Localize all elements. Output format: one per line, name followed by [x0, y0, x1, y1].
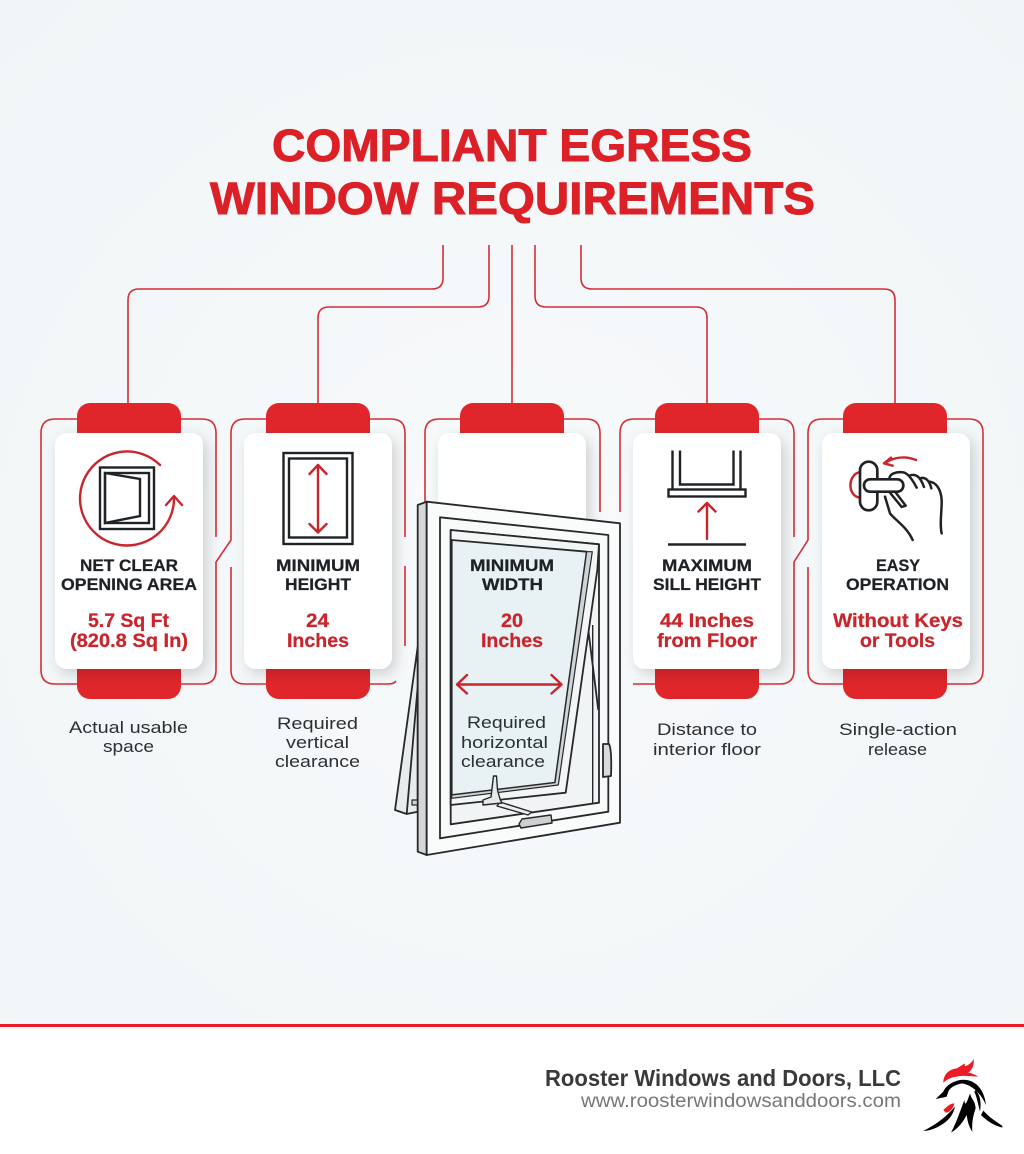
card 4: maximum sill height [633, 403, 781, 699]
footer [0, 1024, 1024, 1154]
label: minimum width: WIDTH [482, 576, 543, 594]
icon: sill with arrow [668, 450, 746, 544]
card 1: net clear opening area: (820.8 Sq In) [70, 631, 188, 652]
card 4: maximum sill height: 44 Inches [660, 611, 754, 632]
icon: window with rotation arrow [80, 451, 182, 545]
caption: distance to interior floor: Distance to [657, 721, 757, 739]
caption: required horizontal clearance: horizontal [461, 734, 548, 752]
card 1: net clear opening area: NET CLEAR [80, 557, 178, 575]
card 4: maximum sill height: from Floor [657, 631, 758, 652]
caption: required vertical clearance: vertical [286, 734, 349, 752]
window: tilted sash and glass [451, 530, 599, 805]
connector lines from title to cards [128, 245, 895, 404]
caption: required horizontal clearance: Required [467, 714, 546, 732]
window: outer frame [418, 502, 620, 855]
card 3: minimum width background [438, 403, 586, 669]
caption: actual usable space: space [103, 738, 154, 756]
caption: required vertical clearance: Required [277, 715, 358, 733]
arrow: horizontal width [457, 675, 562, 694]
caption: required horizontal clearance: clearance [461, 753, 545, 771]
icon: rooster logo [923, 1058, 1002, 1133]
website: www.roosterwindowsanddoors.com [580, 1090, 901, 1112]
card outline brackets [41, 419, 983, 684]
caption: actual usable space [69, 719, 188, 756]
label: minimum width: 20 [501, 611, 523, 632]
label: minimum width: MINIMUM [470, 557, 554, 575]
caption: distance to interior floor [653, 721, 762, 759]
window: left stay and back sash [395, 647, 418, 814]
card 5: easy operation: Without Keys [833, 611, 963, 632]
icon: hand turning lever [850, 457, 942, 540]
card 4: maximum sill height: SILL HEIGHT [653, 576, 761, 594]
card 5: easy operation: or Tools [860, 631, 935, 652]
card 5: easy operation: EASY [876, 557, 920, 575]
caption: required horizontal clearance [461, 714, 548, 771]
window: side lock [603, 744, 611, 777]
card 4: maximum sill height: MAXIMUM [662, 557, 752, 575]
caption: single-action release [839, 721, 957, 759]
label: minimum width: Inches [481, 631, 543, 652]
caption: actual usable space: Actual usable [69, 719, 188, 737]
card 5: easy operation [822, 403, 970, 699]
company name: Rooster Windows and Doors, LLC [545, 1065, 901, 1091]
window: crank handle and arm [483, 776, 552, 828]
caption: distance to interior floor: interior floor [653, 741, 762, 759]
title: WINDOW REQUIREMENTS [210, 173, 815, 224]
title [210, 120, 815, 224]
card 2: minimum height [244, 403, 392, 699]
card 1: net clear opening area: OPENING AREA [61, 576, 197, 594]
caption: single-action release: Single-action [839, 721, 957, 739]
caption: required vertical clearance [275, 715, 360, 771]
card 2: minimum height: 24 [306, 611, 329, 632]
caption: required vertical clearance: clearance [275, 753, 360, 771]
card 1: net clear opening area: 5.7 Sq Ft [88, 611, 170, 632]
card 5: easy operation: OPERATION [846, 576, 949, 594]
icon: window with vertical arrow [284, 453, 352, 544]
card 2: minimum height: MINIMUM [276, 557, 360, 575]
caption: single-action release: release [868, 741, 927, 759]
awning window illustration [395, 502, 620, 855]
card 2: minimum height: HEIGHT [285, 576, 351, 594]
card 1: net clear opening area [55, 403, 203, 699]
title: COMPLIANT EGRESS [272, 120, 752, 171]
card 2: minimum height: Inches [287, 631, 349, 652]
label: minimum width [470, 557, 554, 652]
